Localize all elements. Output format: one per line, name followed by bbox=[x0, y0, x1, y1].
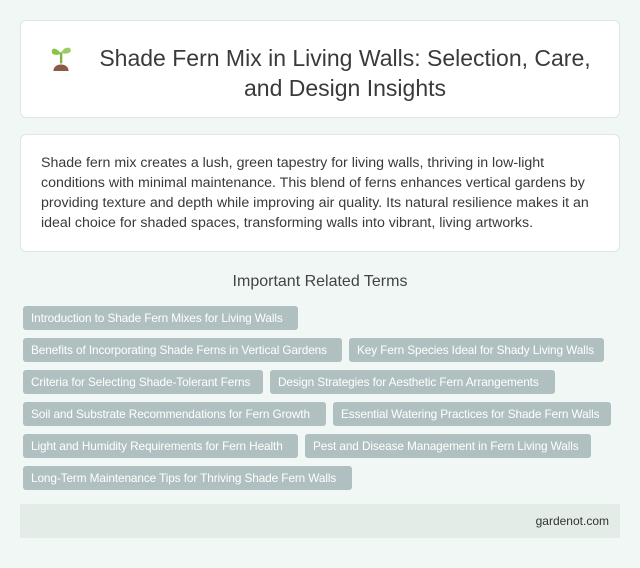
description card bbox=[20, 134, 620, 252]
description text: Shade fern mix creates a lush, green tapestry for living walls, thriving in low-light conditions with minimal maintenance. This blend of ferns enhances vertical gardens by providing texture and depth while improving air quality. Its natural resilience makes it an ideal choice for shaded spaces, transforming walls into vibrant, living artworks. bbox=[41, 155, 589, 231]
header card bbox=[20, 20, 620, 118]
tags: Criteria for Selecting Shade-Tolerant Ferns bbox=[31, 375, 250, 389]
tags: Essential Watering Practices for Shade Fern Walls bbox=[341, 407, 599, 421]
tags: Design Strategies for Aesthetic Fern Arrangements bbox=[278, 375, 539, 389]
footer bbox=[20, 504, 620, 538]
tags: Pest and Disease Management in Fern Living Walls bbox=[313, 439, 579, 453]
tags: Light and Humidity Requirements for Fern Health bbox=[31, 439, 283, 453]
tags: Soil and Substrate Recommendations for Fern Growth bbox=[31, 407, 310, 421]
tags: Benefits of Incorporating Shade Ferns in Vertical Gardens bbox=[31, 343, 327, 357]
tags: Long-Term Maintenance Tips for Thriving Shade Fern Walls bbox=[31, 471, 336, 485]
tags: Introduction to Shade Fern Mixes for Living Walls bbox=[31, 311, 283, 325]
footer: gardenot.com bbox=[536, 514, 609, 528]
icon: seedling bbox=[52, 48, 71, 71]
tags: Key Fern Species Ideal for Shady Living Walls bbox=[357, 343, 594, 357]
title: Shade Fern Mix in Living Walls: Selection, Care, and Design Insights bbox=[99, 45, 591, 101]
related terms heading: Important Related Terms bbox=[233, 273, 407, 290]
